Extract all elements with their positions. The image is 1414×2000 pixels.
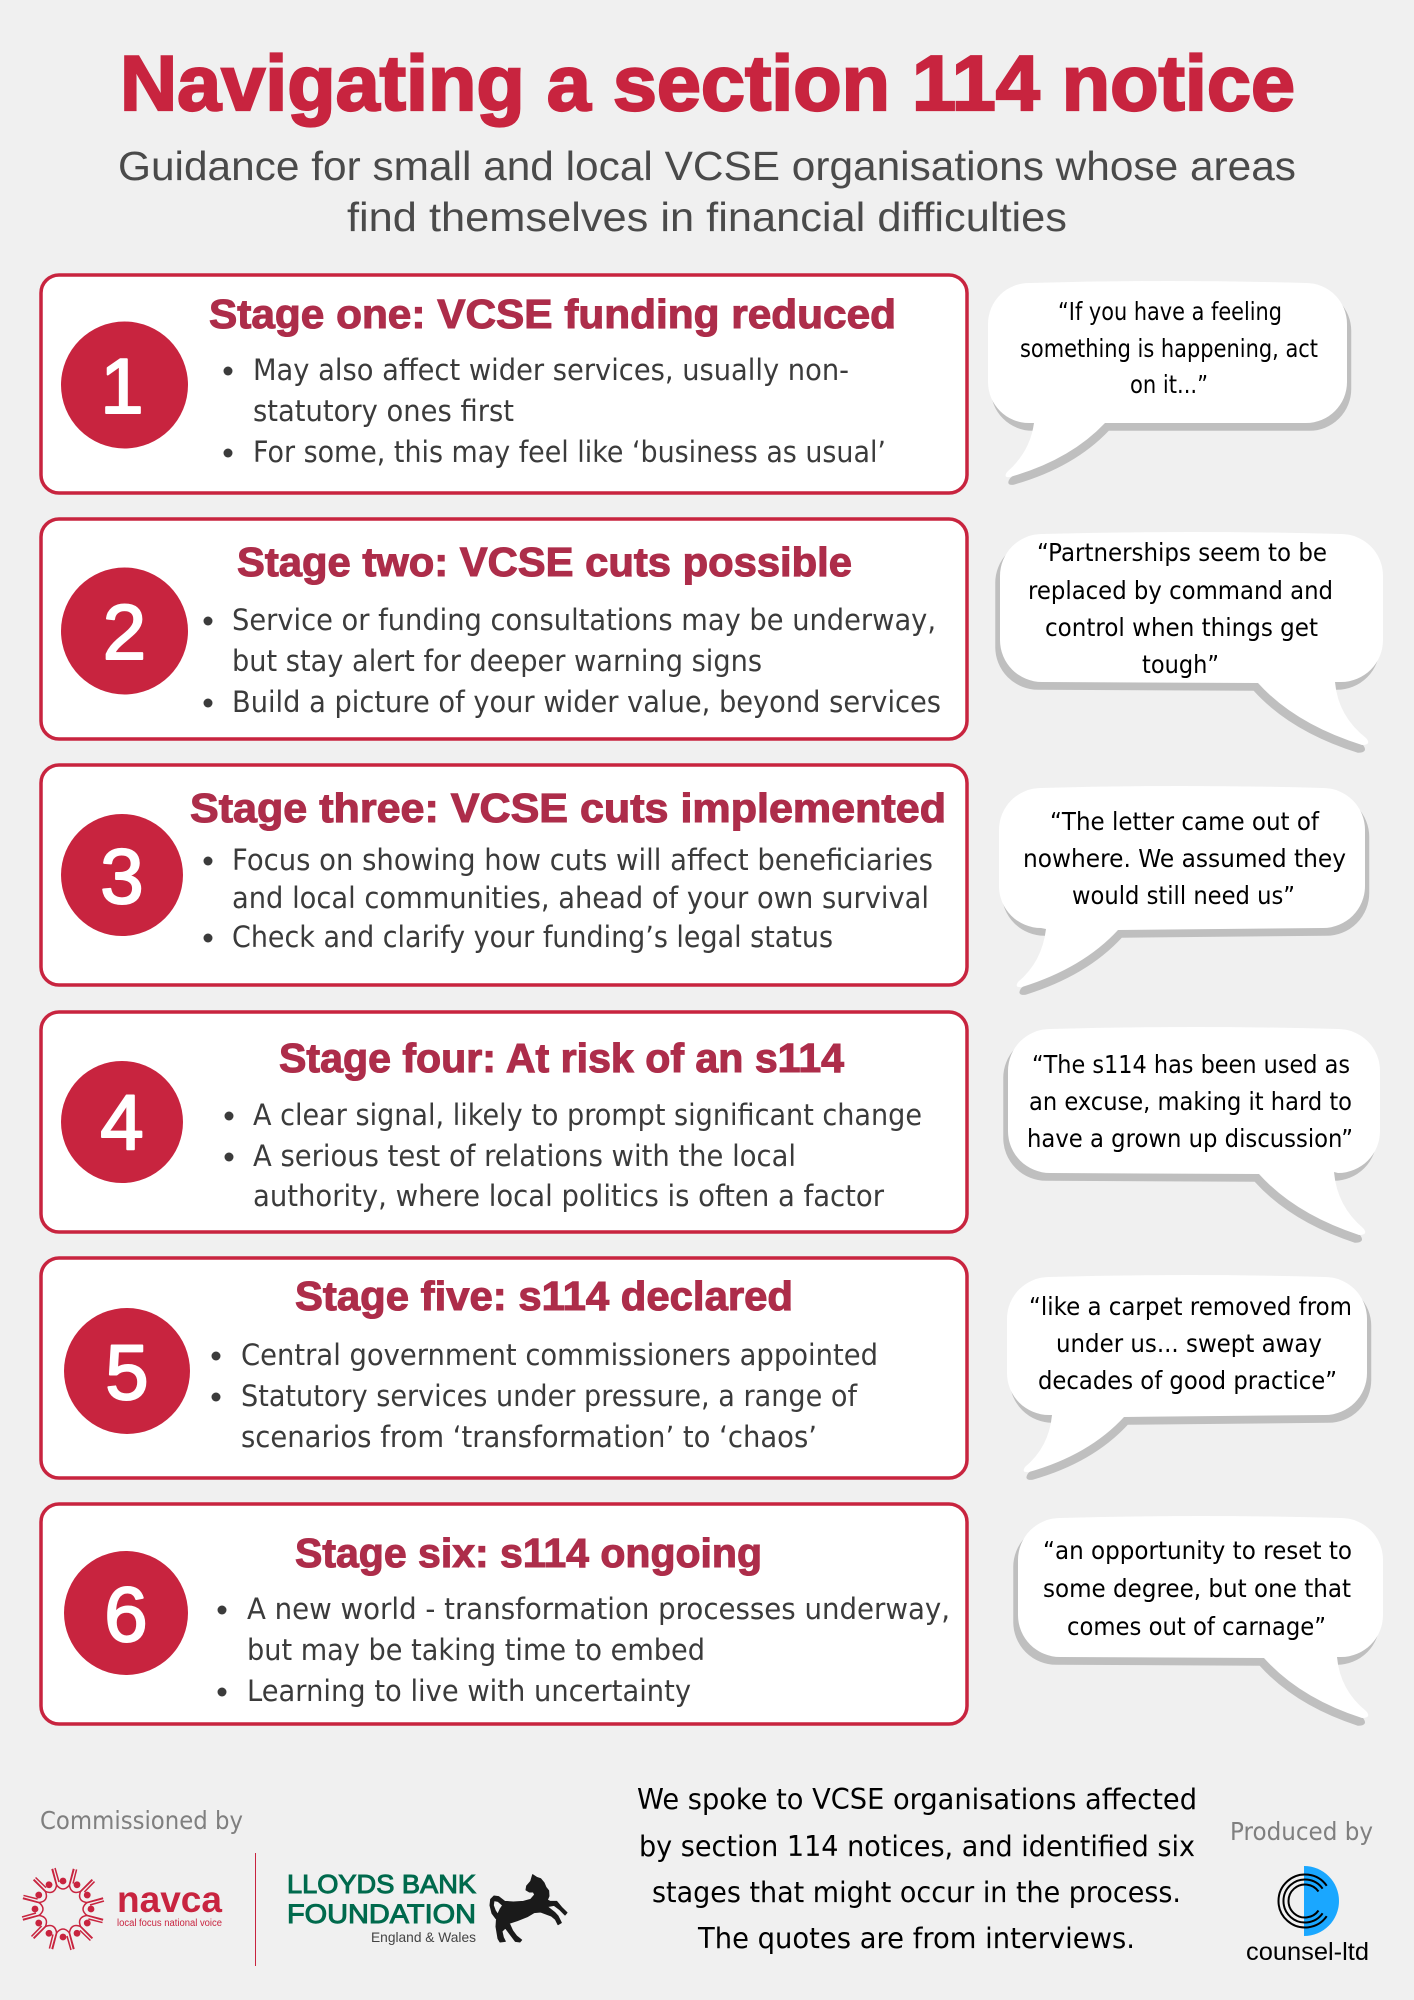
divider between logos (254, 1853, 256, 1966)
quote bubble: stage four (1004, 1027, 1380, 1242)
bullet list: stage three: and local communities, ahead of your own survival (232, 881, 929, 915)
logo: Lloyds Bank Foundation: FOUNDATION (287, 1899, 476, 1929)
quote bubble: stage two: control when things get (1045, 613, 1318, 642)
quote bubble: stage six: some degree, but one that (1043, 1574, 1351, 1603)
produced by label: Produced by (1230, 1817, 1373, 1846)
quote bubble: stage five: “like a carpet removed from (1029, 1292, 1352, 1321)
panel: stage three (41, 765, 967, 985)
bullet list: stage two: Build a picture of your wider value, beyond services (232, 685, 941, 719)
heading: stage four: Stage four: At risk of an s114 (279, 1035, 844, 1081)
footer text (637, 1783, 1197, 1955)
bullet list: stage three: Focus on showing how cuts will affect beneficiaries (232, 843, 933, 877)
quote bubble: stage two: replaced by command and (1028, 576, 1333, 605)
heading: stage six: Stage six: s114 ongoing (295, 1530, 762, 1576)
number badge 5 (64, 1308, 190, 1434)
quote bubble: stage five (1007, 1275, 1370, 1479)
number badge 2: 2 (103, 588, 146, 676)
quote bubble: stage two (996, 532, 1383, 752)
quote bubble: stage one (988, 281, 1350, 484)
bullet list: stage five (212, 1338, 878, 1454)
logo: Lloyds Bank Foundation: England & Wales (371, 1929, 476, 1945)
commissioned by label: Commissioned by (40, 1806, 243, 1835)
quote bubble: stage three: nowhere. We assumed they (1023, 844, 1346, 873)
number badge 1: 1 (100, 342, 144, 430)
panel: stage six (41, 1504, 967, 1724)
quote bubble: stage five: decades of good practice” (1038, 1366, 1337, 1395)
number badge 6: 6 (104, 1570, 148, 1658)
quote bubble: stage two: “Partnerships seem to be (1037, 538, 1327, 567)
number badge 2 (61, 568, 188, 694)
bullet list: stage four (224, 1098, 922, 1213)
footer text: by section 114 notices, and identified six (639, 1830, 1195, 1863)
bullet list: stage one: May also affect wider services, usually non- (253, 353, 849, 387)
logo: Lloyds Bank Foundation (287, 1869, 567, 1945)
quote bubble: stage four: an excuse, making it hard to (1029, 1087, 1352, 1116)
bullet list: stage five: Central government commissioners appointed (241, 1338, 878, 1372)
quote bubble: stage six (1014, 1516, 1383, 1725)
bullet list: stage four: authority, where local politics is often a factor (253, 1179, 885, 1213)
number badge 6 (64, 1551, 188, 1675)
heading: stage three: Stage three: VCSE cuts implemented (190, 785, 946, 831)
number badge 4: 4 (100, 1078, 144, 1166)
bullet list: stage two: Service or funding consultations may be underway, (232, 603, 936, 637)
heading: stage one: Stage one: VCSE funding reduced (209, 291, 896, 337)
quote bubble: stage one: something is happening, act (1020, 334, 1318, 363)
subtitle: Guidance for small and local VCSE organisations whose areas (118, 143, 1296, 189)
logo: counsel-ltd (1246, 1866, 1369, 1966)
logo: Lloyds Bank Foundation: LLOYDS BANK (287, 1869, 477, 1899)
bullet list: stage two: but stay alert for deeper warning signs (232, 644, 762, 678)
icon: black horse (490, 1875, 567, 1942)
bullet list: stage one (224, 353, 886, 469)
number badge 3: 3 (100, 832, 144, 920)
logo: navca (22, 1868, 222, 1950)
quote bubble: stage one: on it...” (1130, 370, 1208, 399)
heading: stage five: Stage five: s114 declared (295, 1273, 793, 1319)
panel: stage one (41, 275, 967, 493)
panel: stage two (41, 519, 967, 739)
bullet list: stage four: A clear signal, likely to prompt significant change (253, 1098, 922, 1132)
bullet list: stage five: scenarios from ‘transformation’ to ‘chaos’ (241, 1420, 817, 1454)
panel: stage four (41, 1012, 967, 1232)
heading: stage two: Stage two: VCSE cuts possible (237, 539, 852, 585)
quote bubble: stage three: would still need us” (1072, 881, 1295, 910)
number badge 3 (61, 814, 183, 936)
bullet list: stage two (204, 603, 941, 719)
number badge 5: 5 (105, 1328, 149, 1416)
logo: counsel-ltd: counsel-ltd (1246, 1938, 1369, 1966)
quote bubble: stage six: “an opportunity to reset to (1043, 1536, 1352, 1565)
subtitle: find themselves in financial difficulties (347, 194, 1067, 240)
bullet list: stage six: but may be taking time to embed (247, 1633, 705, 1667)
footer text: We spoke to VCSE organisations affected (637, 1783, 1197, 1816)
footer text: The quotes are from interviews. (697, 1922, 1135, 1955)
logo: navca: navca (117, 1879, 222, 1920)
bullet list: stage three (204, 843, 933, 954)
quote bubble: stage four: “The s114 has been used as (1032, 1050, 1350, 1079)
quote bubble: stage three: “The letter came out of (1050, 807, 1320, 836)
subtitle (118, 143, 1296, 240)
quote bubble: stage five: under us... swept away (1056, 1329, 1322, 1358)
footer text: stages that might occur in the process. (652, 1876, 1181, 1909)
quote bubble: stage one: “If you have a feeling (1058, 297, 1282, 326)
panel: stage five (41, 1258, 967, 1478)
bullet list: stage one: For some, this may feel like ‘business as usual’ (253, 435, 886, 469)
quote bubble: stage two: tough” (1142, 650, 1219, 679)
quote bubble: stage three (999, 786, 1368, 994)
bullet list: stage six: A new world - transformation processes underway, (247, 1592, 950, 1626)
logo: navca: local focus national voice (117, 1918, 222, 1929)
bullet list: stage four: A serious test of relations with the local (253, 1139, 796, 1173)
title: Navigating a section 114 notice (120, 39, 1295, 127)
bullet list: stage three: Check and clarify your funding’s legal status (232, 920, 833, 954)
bullet list: stage one: statutory ones first (253, 394, 514, 428)
quote bubble: stage six: comes out of carnage” (1067, 1612, 1326, 1641)
number badge 4 (61, 1061, 183, 1183)
bullet list: stage five: Statutory services under pressure, a range of (241, 1379, 858, 1413)
number badge 1 (61, 322, 188, 448)
quote bubble: stage four: have a grown up discussion” (1027, 1124, 1353, 1153)
bullet list: stage six (218, 1592, 950, 1708)
bullet list: stage six: Learning to live with uncertainty (247, 1674, 691, 1708)
